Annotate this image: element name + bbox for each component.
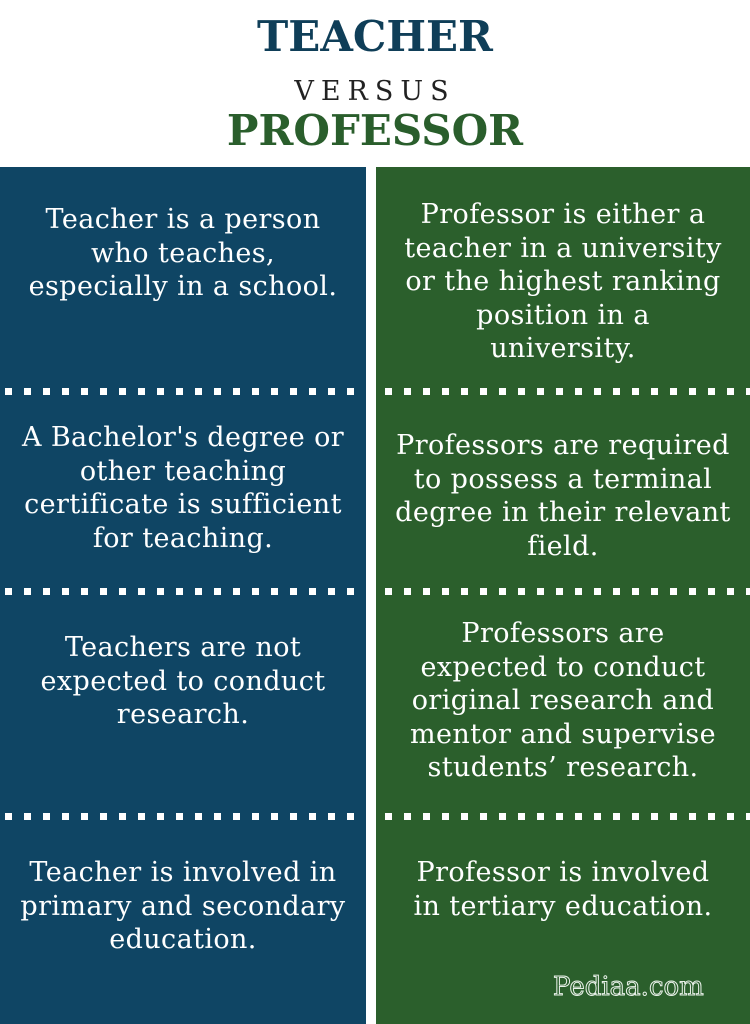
text: professor research: original research and: [412, 685, 714, 716]
text: teacher definition: [29, 204, 337, 302]
text: professor definition: or the highest ranking: [405, 266, 721, 297]
text: professor definition: position in a: [476, 300, 650, 330]
text: professor level: in tertiary education.: [413, 890, 713, 922]
text: professor research: expected to conduct: [420, 652, 705, 682]
text: teacher level: primary and secondary: [20, 890, 346, 922]
title: teacher: TEACHER: [257, 12, 493, 61]
text: teacher definition: especially in a school.: [29, 271, 337, 302]
divider row 3: [0, 813, 750, 820]
text: teacher level: Teacher is involved in: [29, 857, 337, 888]
text: teacher research: [40, 632, 325, 730]
text: teacher qualification: other teaching: [80, 456, 286, 486]
text: teacher research: Teachers are not: [65, 632, 301, 663]
logo: pediaa.com: Pediaa.com: [553, 972, 704, 1002]
text: professor research: Professors are: [461, 618, 665, 649]
text: professor qualification: Professors are required: [396, 430, 730, 461]
title: professor: PROFESSOR: [227, 106, 523, 155]
panel: teacher: [0, 167, 366, 1024]
text: teacher definition: who teaches,: [91, 238, 275, 268]
divider row 1: [0, 388, 750, 395]
text: professor definition: university.: [490, 333, 636, 364]
text: professor qualification: to possess a terminal: [414, 464, 712, 494]
text: professor qualification: field.: [527, 530, 599, 562]
text: teacher qualification: certificate is sufficient: [24, 489, 342, 520]
divider row 2: [0, 588, 750, 595]
panel: professor: [376, 167, 750, 1024]
text: professor qualification: degree in their relevant: [395, 497, 731, 528]
text: teacher definition: Teacher is a person: [46, 204, 320, 235]
title: versus: VERSUS: [294, 76, 456, 107]
text: professor level: Professor is involved: [417, 857, 709, 888]
text: teacher qualification: A Bachelor's degree or: [22, 422, 344, 453]
text: teacher qualification: for teaching.: [93, 522, 273, 554]
text: professor research: [410, 618, 716, 783]
text: teacher research: research.: [117, 699, 249, 730]
text: professor level: [413, 857, 713, 922]
text: professor research: mentor and supervise: [410, 718, 716, 750]
text: teacher level: [20, 857, 346, 955]
text: professor definition: [404, 199, 722, 364]
text: professor definition: Professor is either a: [421, 199, 705, 230]
text: teacher qualification: [22, 422, 344, 554]
text: professor research: students’ research.: [427, 752, 699, 783]
text: professor qualification: [395, 430, 731, 562]
text: professor definition: teacher in a university: [404, 232, 722, 264]
text: teacher research: expected to conduct: [40, 666, 325, 696]
text: teacher level: education.: [109, 924, 257, 955]
